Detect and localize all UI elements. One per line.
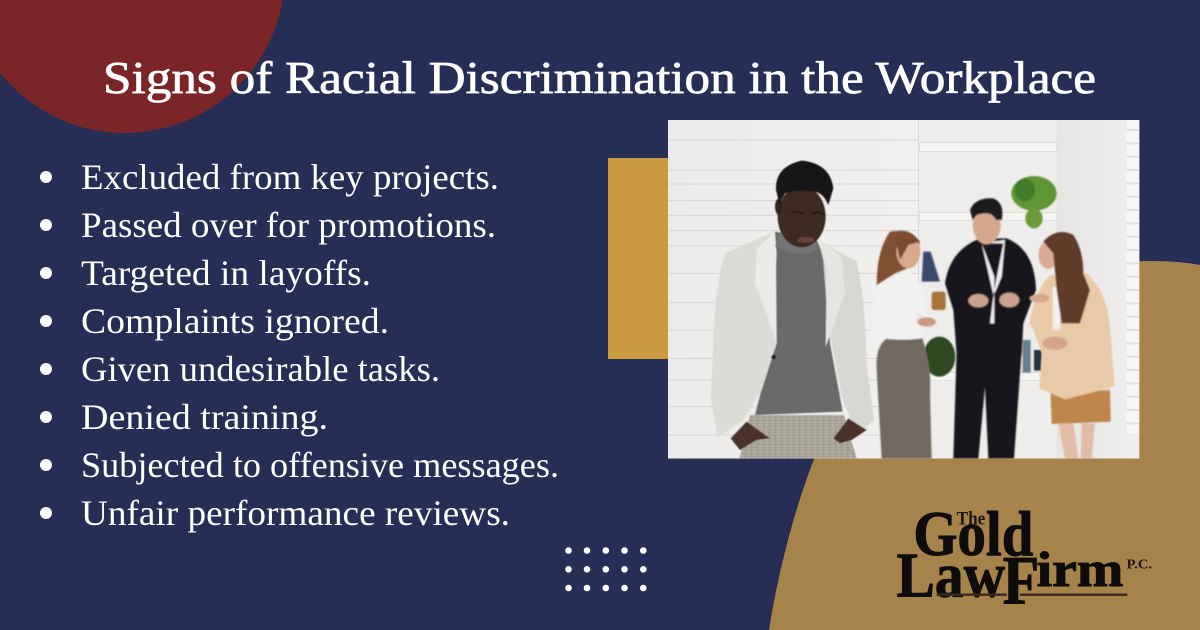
books — [922, 252, 1042, 373]
logo word Firm — [1003, 541, 1123, 618]
bullet 6: Denied training. — [81, 397, 328, 437]
shelves — [919, 143, 1057, 381]
bullet 4: Complaints ignored. — [81, 301, 389, 341]
gold accent rectangle — [608, 158, 668, 359]
logo underline — [937, 591, 1127, 598]
bullet 5: Given undesirable tasks. — [81, 349, 440, 389]
blazer — [711, 232, 777, 438]
logo word Firm: irm — [1037, 541, 1123, 597]
man in black suit — [945, 198, 1036, 459]
title: Signs of Racial Discrimination in the Workplace — [103, 52, 1096, 103]
bullet 1: Excluded from key projects. — [81, 157, 499, 197]
neck and head — [775, 230, 817, 253]
decorative gold shape — [769, 261, 1200, 630]
woman in white shirt — [871, 231, 946, 459]
decorative red circle — [0, 0, 285, 133]
logo: The Gold Law Firm P.C. — [897, 499, 1152, 618]
trousers — [739, 415, 857, 459]
plant on shelf — [1011, 176, 1057, 228]
logo word Law: Law — [897, 541, 1005, 611]
bullet 8: Unfair performance reviews. — [81, 493, 510, 533]
photo: man in foreground with three colleagues talking behind him — [668, 120, 1140, 459]
woman in beige jacket — [1029, 232, 1115, 459]
logo word Gold: Gold — [913, 499, 1033, 569]
bullet 2: Passed over for promotions. — [81, 205, 496, 245]
bullet list — [40, 157, 559, 533]
grey turtleneck — [755, 232, 843, 415]
blazer button — [771, 355, 776, 359]
logo P.C.: P.C. — [1127, 558, 1152, 573]
bullet 7: Subjected to offensive messages. — [81, 445, 559, 485]
logo word Firm: F — [1003, 542, 1039, 618]
hands — [731, 422, 770, 450]
foreground man — [711, 161, 874, 459]
dot grid — [565, 547, 647, 591]
bullet 3: Targeted in layoffs. — [81, 253, 371, 293]
logo word The: The — [957, 509, 986, 530]
office wall — [668, 120, 1140, 459]
lower plant — [923, 337, 955, 377]
